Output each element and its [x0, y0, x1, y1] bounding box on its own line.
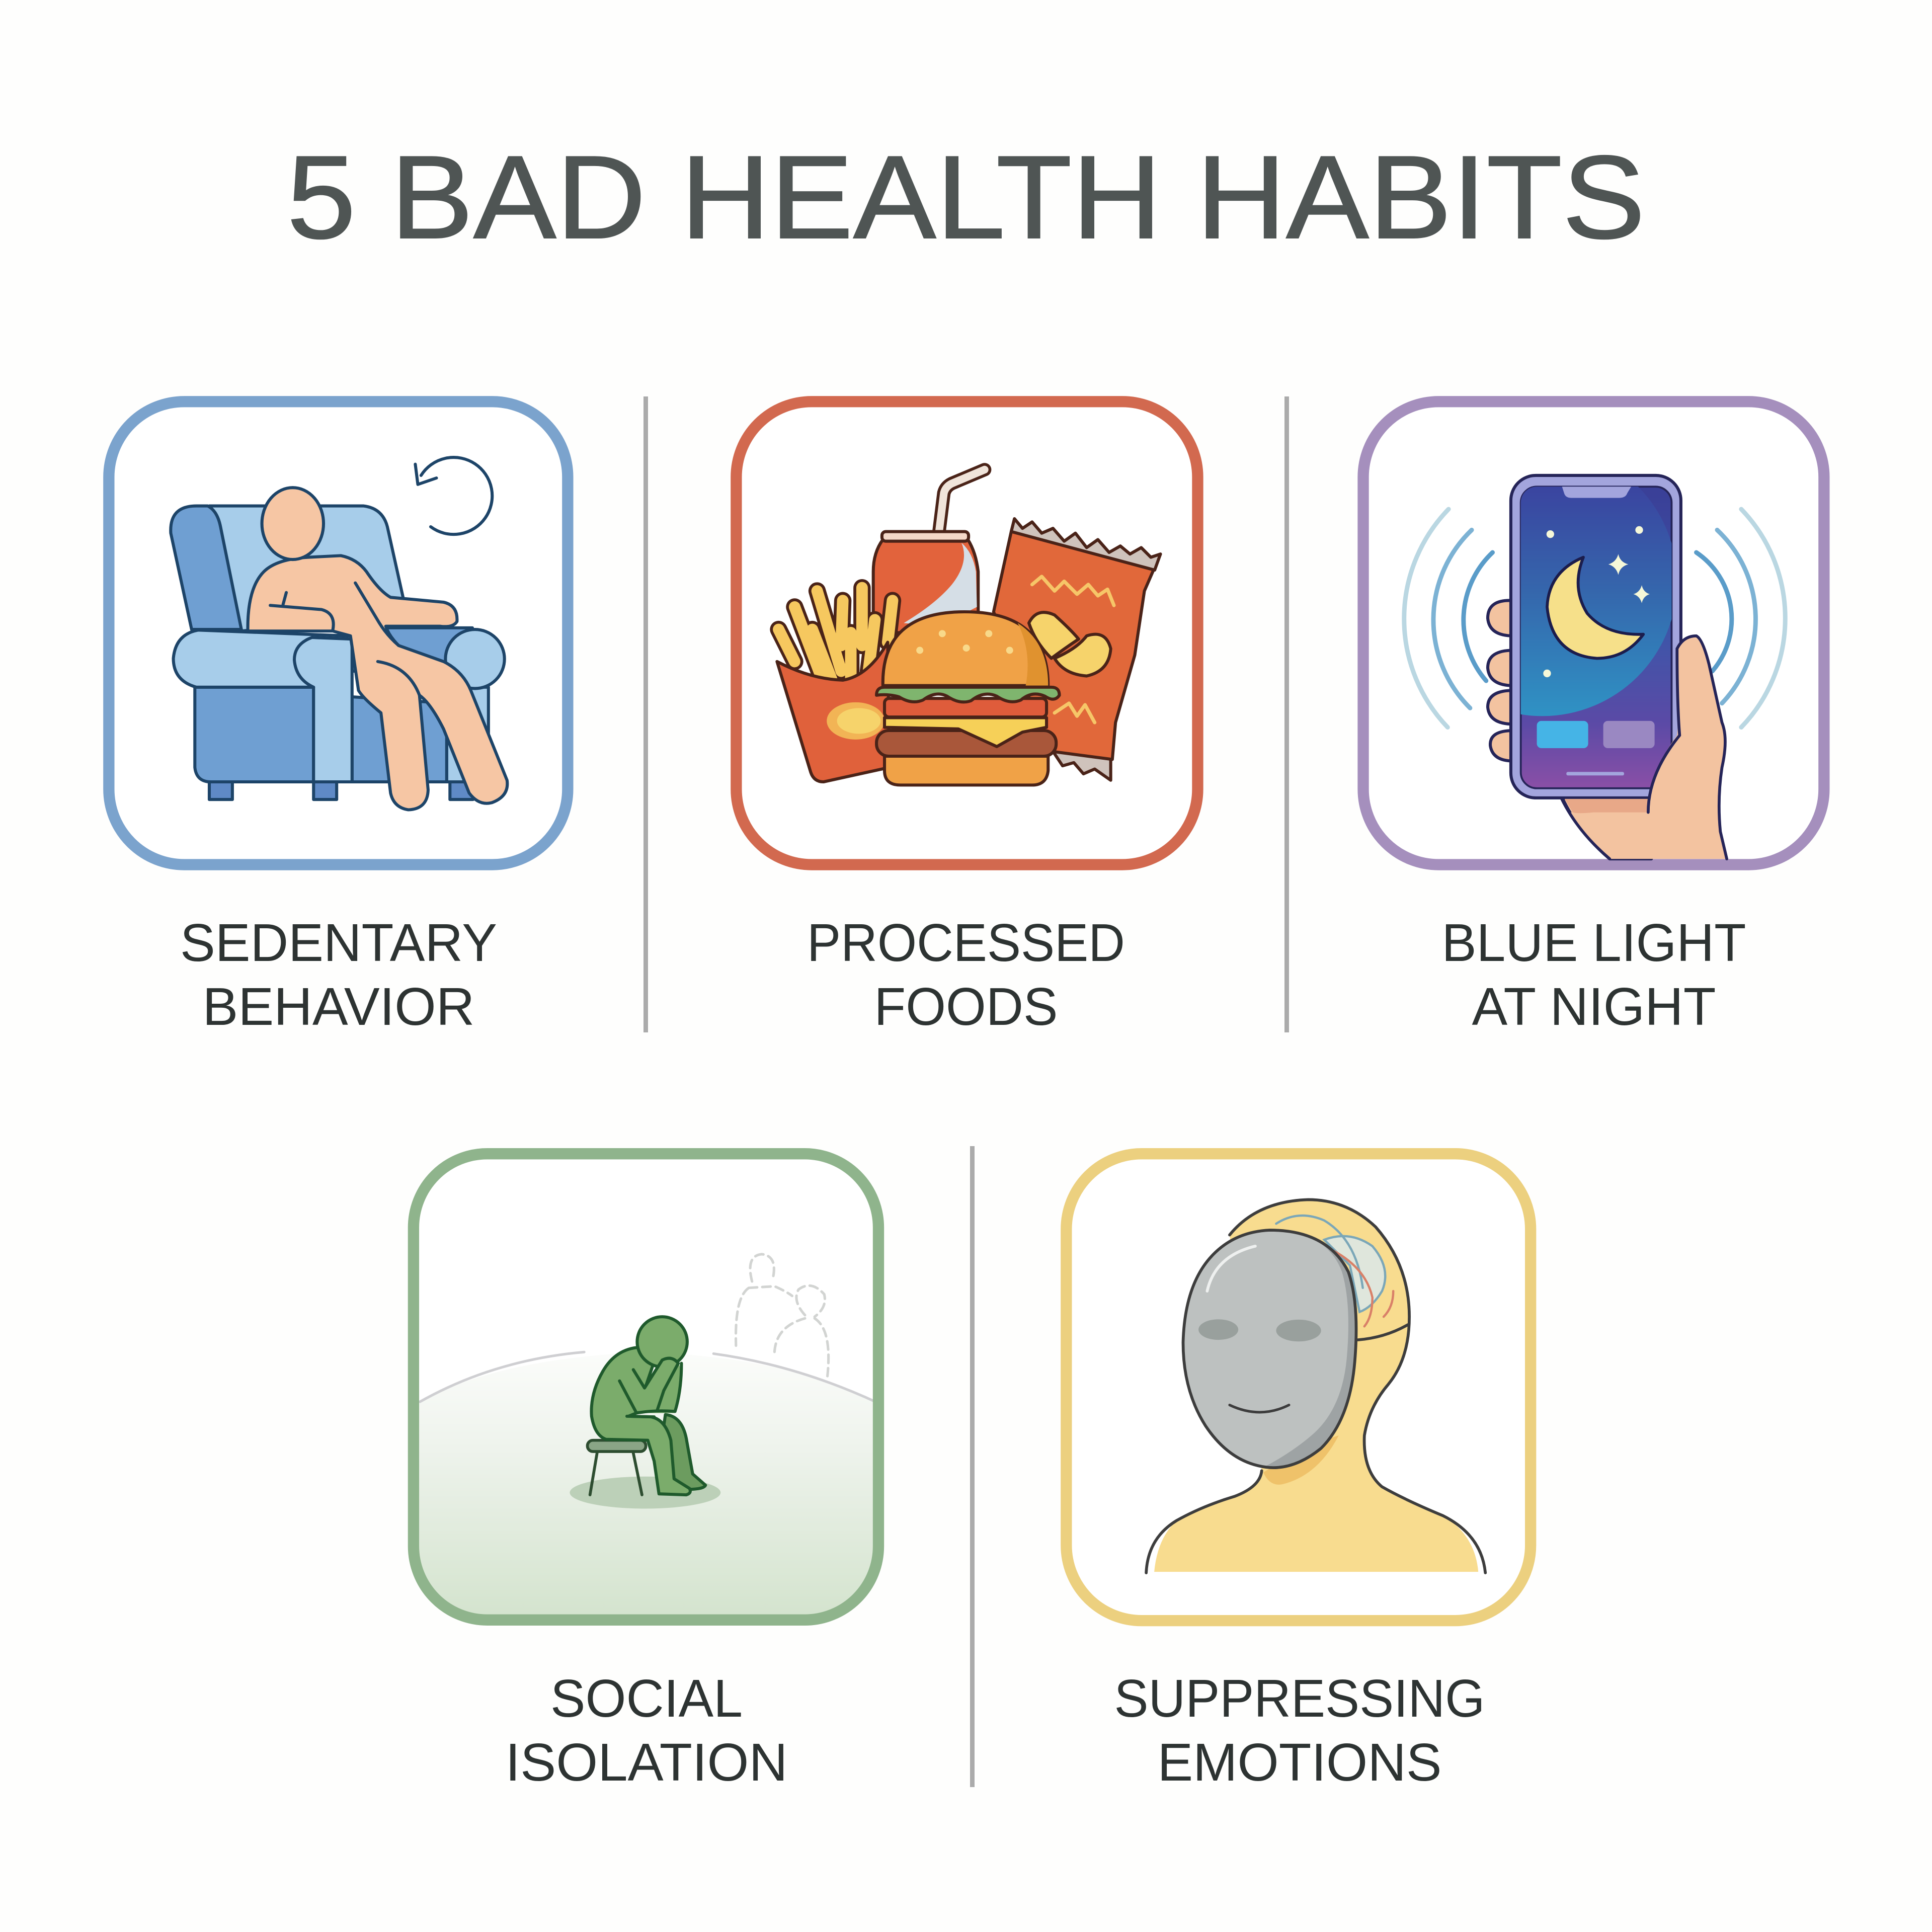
label: sedentary behavior: SEDENTARY [180, 913, 497, 973]
icon: burger [876, 612, 1060, 785]
panel: suppressing emotions [1066, 1154, 1531, 1792]
icon: gray mask [1180, 1227, 1363, 1471]
icon: faded dashed companions [736, 1254, 829, 1376]
label: processed foods: FOODS [874, 977, 1058, 1036]
icon: stool [588, 1440, 646, 1495]
icon: person behind mask [1066, 1154, 1531, 1621]
label: social isolation: SOCIAL [550, 1669, 743, 1728]
label: processed foods [807, 913, 1125, 1036]
icon: chip bag [994, 519, 1160, 780]
label: suppressing emotions [1114, 1669, 1485, 1792]
label: suppressing emotions: SUPPRESSING [1114, 1669, 1485, 1728]
label: sedentary behavior: BEHAVIOR [202, 977, 475, 1036]
label: blue light at night: AT NIGHT [1472, 977, 1716, 1036]
divider: row one left [643, 396, 648, 1032]
icon: light waves [1404, 509, 1785, 728]
label: blue light at night [1442, 913, 1746, 1036]
label: processed foods: PROCESSED [807, 913, 1125, 973]
panel: social isolation [414, 1154, 878, 1792]
icon: armchair and seated person [109, 401, 568, 865]
label: sedentary behavior [180, 913, 497, 1036]
icon: hand and thumb [1562, 636, 1727, 859]
icon: french fries [777, 588, 893, 782]
label: suppressing emotions: EMOTIONS [1157, 1733, 1442, 1792]
icon: isolated seated figure [414, 1154, 878, 1620]
label: blue light at night: BLUE LIGHT [1442, 913, 1746, 973]
panel: processed foods [736, 401, 1197, 1036]
icon: hunched figure [591, 1317, 705, 1495]
title: 5 BAD HEALTH HABITS [287, 131, 1645, 263]
icon: circular arrow [415, 457, 492, 534]
divider: row two [970, 1146, 975, 1787]
icon: phone in hand with night screen [1363, 401, 1824, 865]
label: social isolation: ISOLATION [505, 1733, 788, 1792]
icon: tangled emotion lines [1276, 1216, 1393, 1326]
icon: soda can [873, 532, 978, 632]
divider: row one right [1284, 396, 1289, 1032]
icon: fast food [736, 401, 1197, 865]
panel: sedentary behavior [109, 401, 568, 1036]
icon: moon and stars [1543, 526, 1650, 677]
panel: blue light at night [1363, 401, 1824, 1036]
label: social isolation [505, 1669, 788, 1792]
icon: straw [939, 469, 985, 532]
